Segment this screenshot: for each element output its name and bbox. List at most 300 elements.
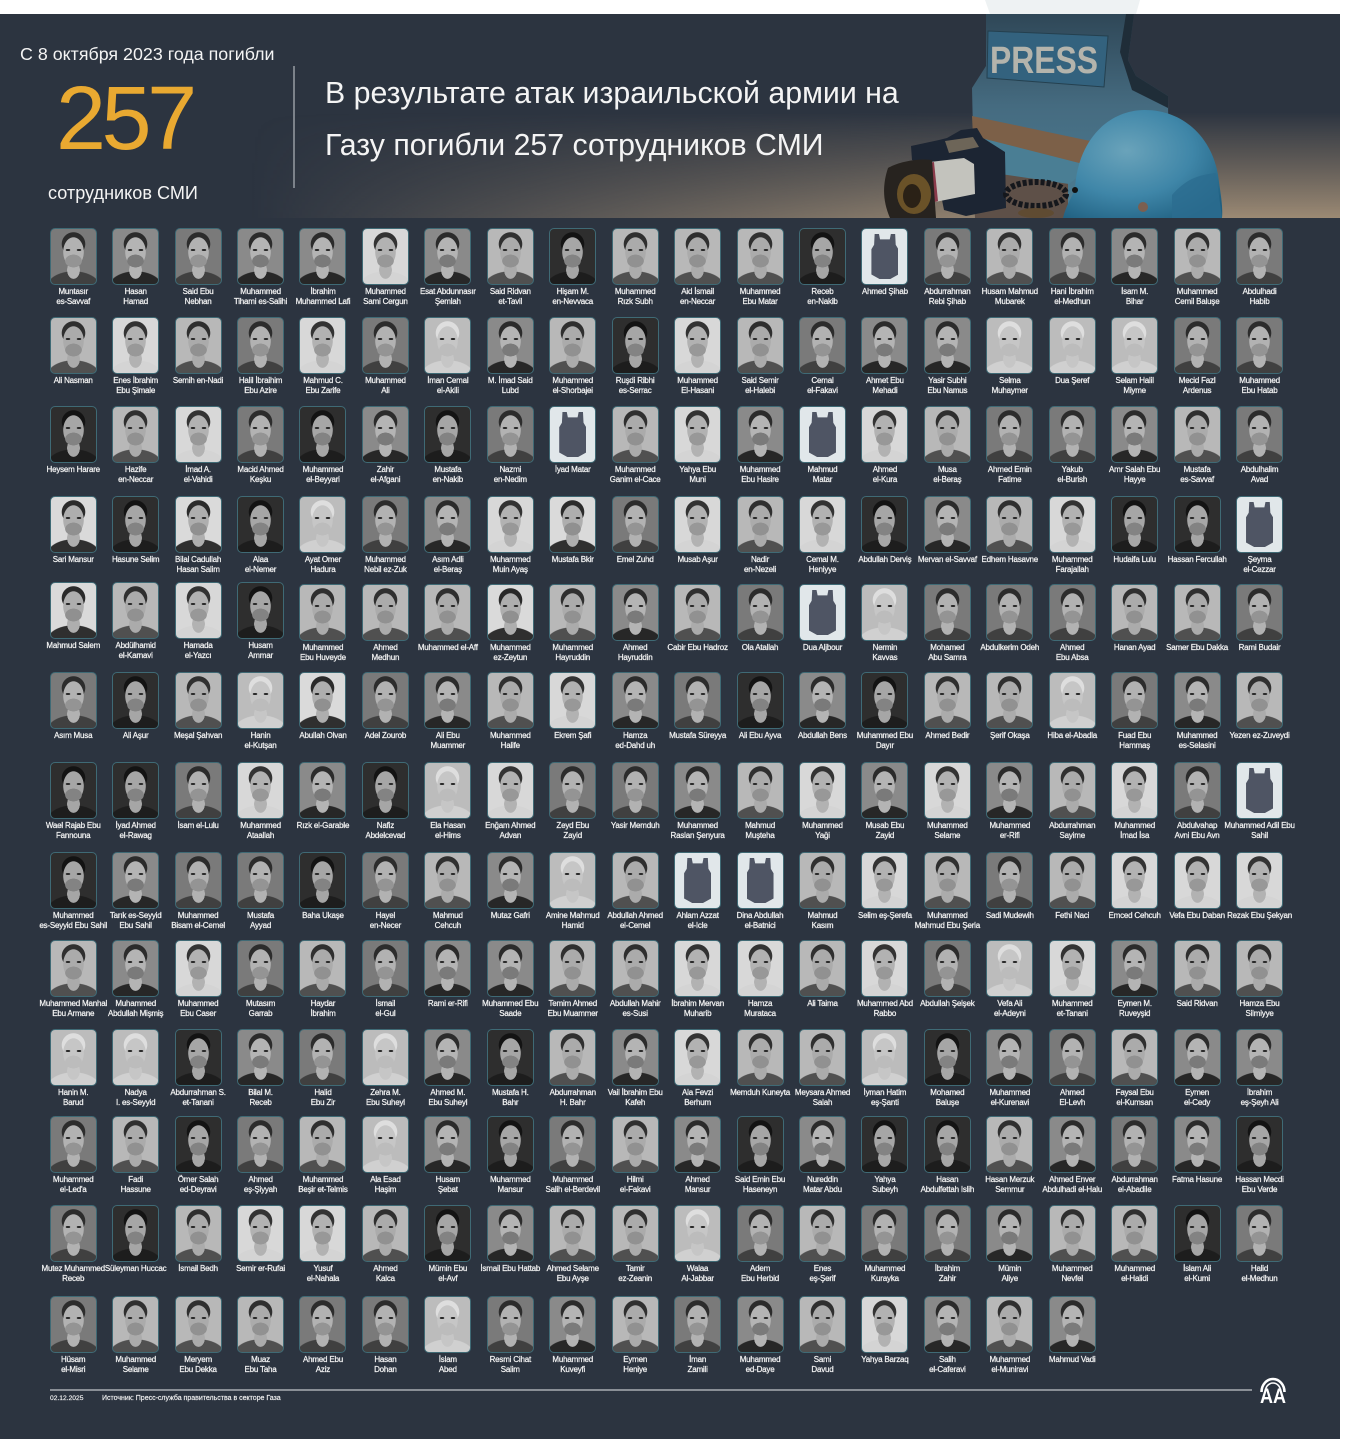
row of portraits 11 (42, 1116, 1302, 1195)
card: Ruşdi Ribhi es-Serrac: Ruşdi Ribhi (616, 376, 655, 385)
card: Muhammed Sami Cergun: Muhammed (365, 287, 406, 296)
card: Abdulkerim Odeh (979, 584, 1041, 663)
card: Receb en-Nakib (799, 228, 846, 306)
card: Selam Halil Miyme: Selam Halil (1116, 376, 1154, 385)
card: Muhammed Abdullah Mişmiş (104, 940, 167, 1019)
card: Muhammed es-Seyyid Ebu Sahil (42, 852, 104, 931)
card: Hazife en-Neccar (104, 406, 167, 485)
card: İslam Ali el-Kumi (1166, 1205, 1228, 1284)
card: Muhammed Bisam el-Cemel (167, 852, 229, 931)
card: Süleyman Huccac (104, 1205, 167, 1284)
card: Abdullah Derviş (854, 496, 916, 575)
card: Ahmed Mansur (666, 1116, 729, 1195)
card: Said Semir el-Halebi (737, 317, 784, 395)
card: İbrahim Muhammed Lafi: İbrahim (310, 287, 336, 296)
card: Resmi Cihat Salim (479, 1296, 542, 1375)
card: İyad Matar: İyad Matar (555, 465, 591, 474)
card: Halil İbraihim Ebu Azire: Halil İbraihim (239, 376, 282, 385)
card: Ahmed Ebu Absa (1041, 584, 1103, 663)
card: Muhammed Adil Ebu Sahil: Sahil (1251, 831, 1268, 840)
card: Mutaz Gafri (479, 852, 542, 931)
card: Hudaifa Lulu: Hudaifa Lulu (1113, 555, 1156, 564)
card: Hasune Selim (104, 496, 167, 575)
card: Muhammed el-Kurenavi: el-Kurenavi (991, 1098, 1029, 1107)
card: Mohamed Abu Samra: Mohamed (930, 643, 964, 652)
card: Muhammed Ebu Matar: Ebu Matar (742, 297, 778, 306)
card: Temim Ahmed Ebu Muammer: Ebu Muammer (548, 1009, 598, 1018)
card: Muhammed el-Muniravi (979, 1296, 1041, 1375)
card: Muhammed Ebu Matar (737, 228, 784, 306)
card: Halil İbraihim Ebu Azire (237, 317, 284, 395)
card: Receb en-Nakib: Receb (811, 287, 834, 296)
card: Muhammed Salih el-Berdevil: Salih el-Berdevil (546, 1185, 600, 1194)
date: 02.12.2025 (50, 1395, 83, 1402)
card: Hamza Ebu Silmiyye: Hamza Ebu (1240, 999, 1280, 1008)
card: Muhammed Ebu Hasire: Muhammed (740, 465, 780, 474)
card: Mahmud Muşteha: Muşteha (745, 831, 775, 840)
card: Hamada el-Yazcı: el-Yazcı (185, 651, 211, 660)
banner illustration: press vest, helmet and camera on sand (314, 0, 1340, 218)
card: Muhammed Cemil Baluşe (1174, 228, 1221, 306)
card: Abdurrahman Sayime: Abdurrahman (1049, 821, 1095, 830)
card: Ahmed Ebu Absa: Ebu Absa (1056, 653, 1089, 662)
card: Şerif Okaşa: Şerif Okaşa (990, 731, 1030, 740)
card: Hanin el-Kutşan: el-Kutşan (245, 741, 277, 750)
card: Ahmed Ebu Absa: Ahmed (1060, 643, 1084, 652)
card: Ahmed Emin Fatime: Ahmed Emin (988, 465, 1032, 474)
footer rule (50, 1389, 1252, 1390)
card: Yakub el-Burish (1041, 406, 1103, 485)
card: Muhammed Selame: Muhammed (115, 1355, 156, 1364)
card: Hasan Hamad (112, 228, 159, 306)
card: Muhammed el-Aff: Muhammed el-Aff (418, 643, 478, 652)
card: Hamza Murataca: Hamza (748, 999, 772, 1008)
card: Resmi Cihat Salim: Salim (501, 1365, 520, 1374)
card: Muhammed el-Halidi: el-Halidi (1121, 1274, 1148, 1283)
card: Semih en-Nadi: Semih en-Nadi (173, 376, 223, 385)
card: Hanin M. Barud (42, 1029, 104, 1108)
card: Ahmed Medhun: Ahmed (373, 643, 398, 652)
card: Abdurrahman Rebi Şihab: Rebi Şihab (929, 297, 966, 306)
card: Abdullah Mahir es-Susi: Abdullah Mahir (610, 999, 660, 1008)
card: Bilal Cadullah Hasan Salim: Bilal Cadullah (175, 555, 221, 564)
card: Hiba el-Abadla (1041, 672, 1103, 751)
row of portraits 1 (50, 228, 1283, 306)
card: Abdullah Ahmed el-Cemel (604, 852, 666, 931)
card: Wael Rajab Ebu Fannouna (42, 762, 104, 841)
card: Muhammed Raslan Şenyura: Muhammed (677, 821, 718, 830)
card: Ahlam Azzat el-Icle: el-Icle (688, 921, 708, 930)
card: Muhammed Rızk Subh (612, 228, 659, 306)
card: Halid el-Medhun: Halid (1251, 1264, 1268, 1273)
card: Eymen el-Cedy (1166, 1029, 1228, 1108)
card: Muntasır es-Savvaf: es-Savvaf (56, 297, 90, 306)
card: Amr Salah Ebu Hayye: Hayye (1124, 475, 1146, 484)
card: Ahmed Enver Abdulhadi el-Halu: Ahmed Enver (1049, 1175, 1095, 1184)
card: Ayat Omer Hadura: Ayat Omer (305, 555, 341, 564)
card: Muhammed Nebil ez-Zuk (354, 496, 417, 575)
card: Nermin Kavvas: Nermin (873, 643, 897, 652)
card: Muhammed Rızk Subh: Rızk Subh (618, 297, 653, 306)
card: Abdurrahman H. Bahr: H. Bahr (560, 1098, 586, 1107)
card: Meşal Şahvan: Meşal Şahvan (174, 731, 222, 740)
card: Nazmi en-Nedim: Nazmi (499, 465, 521, 474)
card: Muhammed Raslan Şenyura: Raslan Şenyura (671, 831, 725, 840)
card: Bilal Cadullah Hasan Salim (167, 496, 229, 575)
card: Selam Halil Miyme: Miyme (1123, 386, 1146, 395)
card: İsmail el-Gul: İsmail (376, 999, 395, 1008)
card: Sari Mansur: Sari Mansur (53, 555, 94, 564)
card: Abdullah Ahmed el-Cemel: el-Cemel (620, 921, 650, 930)
card: Muhammed Ebu Dayır: Dayır (876, 741, 894, 750)
card: Faysal Ebu el-Kumsan: Faysal Ebu (1116, 1088, 1154, 1097)
card: Nazmi en-Nedim: en-Nedim (494, 475, 527, 484)
card: Ruşdi Ribhi es-Serrac: es-Serrac (619, 386, 652, 395)
card: Emel Zuhd (604, 496, 666, 575)
card: Mahmud Vadi (1041, 1296, 1103, 1375)
card: Adem Ebu Herbid (729, 1205, 791, 1284)
card: Muhammed es-Seyyid Ebu Sahil: Muhammed (53, 911, 94, 920)
card: Muhammed Halife (479, 672, 542, 751)
card: İyman Hatim eş-Şanti (854, 1029, 916, 1108)
card: Adel Zourob (354, 672, 417, 751)
card: Mutasım Garrab: Garrab (249, 1009, 272, 1018)
card: Walaa Al-Jabbar: Walaa (687, 1264, 708, 1273)
card: Muhammed er-Rifi: er-Rifi (1000, 831, 1020, 840)
card: Muhammed Nevfel: Nevfel (1061, 1274, 1083, 1283)
card: İbrahim Muhammed Lafi: Muhammed Lafi (296, 297, 350, 306)
card: Mümin Ebu el-Avf (417, 1205, 479, 1284)
card: Mahmud Salem: Mahmud Salem (46, 641, 100, 650)
card: Ali Taima: Ali Taima (807, 999, 838, 1008)
card: Mustafa Bkir: Mustafa Bkir (552, 555, 594, 564)
card: Fuad Ebu Hammaş: Fuad Ebu (1118, 731, 1151, 740)
card: Ahmed Mansur: Ahmed (685, 1175, 710, 1184)
card: Muhammed Ebu Hasire: Ebu Hasire (741, 475, 779, 484)
card: Enes İbrahim Ebu Şimale: Enes İbrahim (113, 376, 158, 385)
card: Ahmed Enver Abdulhadi el-Halu: Abdulhadi el-Halu (1042, 1185, 1102, 1194)
card: Muhammed İmad İsa (1103, 762, 1166, 841)
card: Mustafa Süreyya (666, 672, 729, 751)
card: Eymen M. Ruveyşid (1103, 940, 1166, 1019)
card: Fethi Naci: Fethi Naci (1055, 911, 1089, 920)
card: Muhammed Beşir et-Telmis: Muhammed (303, 1175, 343, 1184)
card: Samer Ebu Dakka: Samer Ebu Dakka (1166, 643, 1228, 652)
card: Mohamed Baluşe (916, 1029, 979, 1108)
card: Esat Abdunnasır Şemlah (420, 228, 476, 306)
card: Abdulhadi Habib (1236, 228, 1283, 306)
card: Muhammed et-Tanani: Muhammed (1052, 999, 1093, 1008)
card: Hasune Selim: Hasune Selim (112, 555, 159, 564)
card: Abdullah Mahir es-Susi (604, 940, 666, 1019)
card: Cemal M. Heniyye (791, 496, 854, 575)
card: Sari Mansur (42, 496, 104, 575)
card: Hassan Mecdi Ebu Verde (1228, 1116, 1291, 1195)
card: Eymen el-Cedy: Eymen (1185, 1088, 1209, 1097)
card: Muntasır es-Savvaf: Muntasır (58, 287, 88, 296)
card: İbrahim Mervan Muharib: İbrahim Mervan (671, 999, 724, 1008)
card: İyman Hatim eş-Şanti: eş-Şanti (871, 1098, 899, 1107)
card: İsmail Bedh (167, 1205, 229, 1284)
card: Ahmed Ebu Aziz (292, 1296, 354, 1375)
card: Nermin Kavvas: Kavvas (872, 653, 897, 662)
card: Husam Şebat (417, 1116, 479, 1195)
card: Hasan Dohan (354, 1296, 417, 1375)
card: Musab Ebu Zayid: Zayid (876, 831, 894, 840)
card: Halil İbraihim Ebu Azire: Ebu Azire (244, 386, 277, 395)
card: Muhammed El-Hasani: El-Hasani (681, 386, 714, 395)
card: Muhammed el-Shorbajei: Muhammed (552, 376, 593, 385)
card: Abdullah Bens: Abdullah Bens (798, 731, 847, 740)
card: Alaa el-Nemer (229, 496, 292, 575)
card: Muhammed Ebu Huveyde: Muhammed (303, 643, 343, 652)
card: Muhammed Bisam el-Cemel: Muhammed (178, 911, 218, 920)
card: Ayat Omer Hadura: Hadura (310, 565, 335, 574)
card: Mustafa es-Savvaf: es-Savvaf (1180, 475, 1214, 484)
card: Muhammed Ebu Saade: Muhammed Ebu (482, 999, 538, 1008)
card: Mustafa Süreyya: Mustafa Süreyya (669, 731, 726, 740)
card: Ahmet Ebu Mehadi: Ahmet Ebu (866, 376, 904, 385)
card: Mustafa H. Bahr: Bahr (502, 1098, 518, 1107)
card: Muhammed Mahmud Ebu Şeria (916, 852, 979, 931)
card: Ahmed El-Levh: Ahmed (1060, 1088, 1084, 1097)
card: Cabir Ebu Hadroz (666, 584, 729, 663)
row of portraits 3 (42, 406, 1302, 485)
card: Ekrem Şafi: Ekrem Şafi (554, 731, 591, 740)
card: Mustafa Ayyad: Mustafa (247, 911, 274, 920)
card: Fuad Ebu Hammaş: Hammaş (1119, 741, 1150, 750)
card: İsam el-Lulu: İsam el-Lulu (178, 821, 219, 830)
card: Muhammed Ebu Dayır: Muhammed Ebu (857, 731, 913, 740)
card: Nureddin Matar Abdu: Matar Abdu (803, 1185, 842, 1194)
card: Ahmet Ebu Mehadi: Mehadi (872, 386, 897, 395)
card: Ali Nasman (50, 317, 97, 385)
card: Abullah Olvan (292, 672, 354, 751)
card: Hiba el-Abadla: Hiba el-Abadla (1047, 731, 1097, 740)
card: Muhammed Ebu Caser: Ebu Caser (180, 1009, 216, 1018)
card: Ahmed Hayruddin: Hayruddin (618, 653, 652, 662)
card: Zeyd Ebu Zayid: Zeyd Ebu (556, 821, 589, 830)
row of portraits 4 (42, 496, 1302, 575)
card: Tarık es-Seyyid Ebu Sahil (104, 852, 167, 931)
card: Macid Ahmed Keşku: Keşku (250, 475, 271, 484)
card: Muhammed es-Selasini (1166, 672, 1228, 751)
card: Rezak Ebu Şekyan: Rezak Ebu Şekyan (1227, 911, 1292, 920)
card: Salih el-Caferavi (916, 1296, 979, 1375)
card: Muhammed Nevfel: Muhammed (1052, 1264, 1093, 1273)
card: Mecid Fazl Ardenus: Ardenus (1183, 386, 1211, 395)
card: Musab Ebu Zayid (854, 762, 916, 841)
card: Muhammed el-Beyyari: Muhammed (303, 465, 343, 474)
card: Ahmed Kalca: Kalca (376, 1274, 395, 1283)
card: Amine Mahmud Hamid (542, 852, 604, 931)
card: Muhammed Ebu Hatab: Muhammed (1239, 376, 1280, 385)
card: Muhammed el-Beyyari (292, 406, 354, 485)
card: Sadi Mudewih (979, 852, 1041, 931)
card: Vefa Ebu Daban (1166, 852, 1228, 931)
card: Abdulkerim Odeh: Abdulkerim Odeh (980, 643, 1039, 652)
card: Mutez Muhammed Receb: Mutez Muhammed (41, 1264, 105, 1273)
card: Adem Ebu Herbid: Ebu Herbid (741, 1274, 779, 1283)
card: İslam Ali el-Kumi: İslam Ali (1183, 1264, 1211, 1273)
card: Emced Cehcuh (1103, 852, 1166, 931)
card: Ahmed M. Ebu Suheyl: Ahmed M. (430, 1088, 465, 1097)
card: Muhammed Beşir et-Telmis (292, 1116, 354, 1195)
card: İbrahim eş-Şeyh Ali: İbrahim (1247, 1088, 1272, 1097)
card: Nermin Kavvas (854, 584, 916, 663)
card: Muhammed Mansur (479, 1116, 542, 1195)
card: Ahmed Ebu Aziz: Ahmed Ebu (303, 1355, 343, 1364)
card: İmad A. el-Vahidi: el-Vahidi (184, 475, 212, 484)
card: Abdurrahman el-Abadile (1103, 1116, 1166, 1195)
card: Muhammed Sami Cergun (362, 228, 409, 306)
card: Selam Halil Miyme (1103, 317, 1166, 396)
card: Said Ridvan et-Tavil: Said Ridvan (490, 287, 531, 296)
card: Baha Ukaşe (292, 852, 354, 931)
card: Abdurrahman el-Abadile: el-Abadile (1118, 1185, 1151, 1194)
card: Muhammed ez-Zeytun: Muhammed (490, 643, 531, 652)
card: Muhammed Abdullah Mişmiş: Abdullah Mişmiş (108, 1009, 163, 1018)
card: Mümin Aliye (979, 1205, 1041, 1284)
card: Mervan el-Savvaf (916, 496, 979, 575)
card: Meysara Ahmed Salah: Meysara Ahmed (795, 1088, 850, 1097)
card: Muhammed el-Muniravi: el-Muniravi (991, 1365, 1028, 1374)
card: Zeyd Ebu Zayid: Zayid (563, 831, 582, 840)
card: Mustafa en-Nakib: en-Nakib (433, 475, 463, 484)
card: Muhammed Abd Rabbo (854, 940, 916, 1019)
card: Şeyma el-Cezzar: el-Cezzar (1243, 565, 1276, 574)
card: Ahmed Emin Fatime (979, 406, 1041, 485)
card: Nafiz Abdelcevad (354, 762, 417, 841)
card: Mahmud Cehcuh (417, 852, 479, 931)
card: Muhammed es-Selasini: Muhammed (1177, 731, 1217, 740)
card: Cemal el-Fakavi (799, 317, 846, 395)
row of portraits 5 (42, 584, 1302, 663)
helmet (1063, 110, 1222, 218)
card: Ola Atallah: Ola Atallah (742, 643, 778, 652)
card: Yasir Subhi Ebu Namus: Yasir Subhi (928, 376, 966, 385)
card: Enes İbrahim Ebu Şimale (112, 317, 159, 395)
card: Muhammed Farajallah (1041, 496, 1103, 575)
card: Muhammed el-Muniravi: Muhammed (989, 1355, 1030, 1364)
card: Yahya Barzaq: Yahya Barzaq (861, 1355, 909, 1364)
card: Muhammed Adil Ebu Sahil: Muhammed Adil Ebu (1224, 821, 1295, 830)
card: Musa el-Beraş (916, 406, 979, 485)
card: Husam Şebat: Husam (436, 1175, 460, 1184)
card: Fethi Naci (1041, 852, 1103, 931)
card: Muhammed Halife: Muhammed (490, 731, 531, 740)
card: Hassan Mecdi Ebu Verde: Ebu Verde (1242, 1185, 1277, 1194)
card: Muhammed Tihami es-Salihi: Muhammed (240, 287, 281, 296)
card: Zehra M. Ebu Suheyl: Zehra M. (370, 1088, 401, 1097)
card: Haydar İbrahim: Haydar (311, 999, 335, 1008)
card: Muhammed Ali: Ali (381, 386, 390, 395)
card: Muhammed Hayruddin (542, 584, 604, 663)
card: Enğam Ahmed Advan (479, 762, 542, 841)
card: Hasan Dohan: Hasan (374, 1355, 396, 1364)
card: Aid İsmail en-Neccar (674, 228, 721, 306)
card: Mahmud Muşteha (729, 762, 791, 841)
card: İsmail el-Gul (354, 940, 417, 1019)
card: Eymen M. Ruveyşid: Ruveyşid (1119, 1009, 1150, 1018)
card: Şeyma el-Cezzar: Şeyma (1248, 555, 1271, 564)
card: İman Cemal el-Akili: İman Cemal (427, 376, 468, 385)
card: Dua Aljbour: Dua Aljbour (803, 643, 842, 652)
row of portraits 2 (50, 317, 1283, 395)
card: Sami Davud (791, 1296, 854, 1375)
card: Abdullah Derviş: Abdullah Derviş (858, 555, 911, 564)
card: Muhammed ed-Daye: ed-Daye (746, 1365, 774, 1374)
card: Abdullah Şelşek: Abdullah Şelşek (920, 999, 975, 1008)
card: Muhammed Raslan Şenyura (666, 762, 729, 841)
card: Muhammed Tihami es-Salihi: Tihami es-Salihi (234, 297, 287, 306)
card: Muhammed Ali: Muhammed (365, 376, 406, 385)
card: Receb en-Nakib: en-Nakib (807, 297, 838, 306)
card: Muhammed Adil Ebu Sahil (1228, 762, 1291, 841)
card: Muhammed Tihami es-Salihi (234, 228, 287, 306)
card: Muhammed Selame: Selame (123, 1365, 149, 1374)
card: Yezen ez-Zuveydi (1228, 672, 1291, 751)
card: Muhammed el-Beyyari: el-Beyyari (306, 475, 340, 484)
card: Muhammed Ganim el-Cace (604, 406, 666, 485)
vest (972, 14, 1169, 218)
card: Asım Adli el-Beraş (417, 496, 479, 575)
card: Hasan Abdulfettah Islih (916, 1116, 979, 1195)
card: Emced Cehcuh: Emced Cehcuh (1108, 911, 1161, 920)
card: Faysal Ebu el-Kumsan (1103, 1029, 1166, 1108)
card: Said Semir el-Halebi: Said Semir (741, 376, 779, 385)
card: Ahmed Hayruddin: Ahmed (623, 643, 647, 652)
card: Fuad Ebu Hammaş (1103, 672, 1166, 751)
card: Mustafa H. Bahr: Mustafa H. (492, 1088, 529, 1097)
card: Ahmed eş-Şiyyah (229, 1116, 292, 1195)
card: Zeyd Ebu Zayid (542, 762, 604, 841)
card: Yusuf el-Nahala: Yusuf (313, 1264, 332, 1273)
card: Hamza Ebu Silmiyye (1228, 940, 1291, 1019)
card: Semir er-Rufai: Semir er-Rufai (236, 1264, 285, 1273)
card: İbrahim Mervan Muharib (666, 940, 729, 1019)
card: Sami Davud: Davud (811, 1365, 834, 1374)
card: Ahmed eş-Şiyyah: eş-Şiyyah (244, 1185, 277, 1194)
card: Muhammed Nebil ez-Zuk: Muhammed (365, 555, 406, 564)
card: Muhammed el-Kurenavi: Muhammed (989, 1088, 1030, 1097)
card: Samer Ebu Dakka (1166, 584, 1228, 663)
card: Ahmed el-Kura (854, 406, 916, 485)
card: Hamza Ebu Silmiyye: Silmiyye (1245, 1009, 1274, 1018)
card: İmad A. el-Vahidi (167, 406, 229, 485)
card: Muhammed Ebu Huveyde: Ebu Huveyde (300, 653, 346, 662)
card: Meysara Ahmed Salah: Salah (813, 1098, 832, 1107)
card: Alaa el-Nemer: el-Nemer (245, 565, 276, 574)
card: Abdulhadi Habib: Habib (1250, 297, 1269, 306)
card: Muhammed Hayruddin: Muhammed (552, 643, 593, 652)
card: Hasan Dohan: Dohan (374, 1365, 397, 1374)
card: Rami er-Rifi (417, 940, 479, 1019)
row of portraits 10 (42, 1029, 1302, 1108)
card: Wael Rajab Ebu Fannouna: Wael Rajab Ebu (46, 821, 101, 830)
card: Ahmed Kalca: Ahmed (373, 1264, 398, 1273)
card: Husam Ammar: Ammar (248, 651, 273, 660)
card: Bilal M. Receb: Bilal M. (248, 1088, 273, 1097)
card: Ahmed M. Ebu Suheyl: Ebu Suheyl (428, 1098, 467, 1107)
card: İyad Ahmed el-Rawag (104, 762, 167, 841)
card: Muhammed el-Shorbajei (549, 317, 596, 395)
card: Muhammed Selame: Selame (934, 831, 960, 840)
card: Yahya Barzaq (854, 1296, 916, 1375)
card: Mohamed Abu Samra: Abu Samra (928, 653, 966, 662)
card: Asım Adli el-Beraş: el-Beraş (434, 565, 462, 574)
card: Hanin M. Barud: Barud (63, 1098, 83, 1107)
